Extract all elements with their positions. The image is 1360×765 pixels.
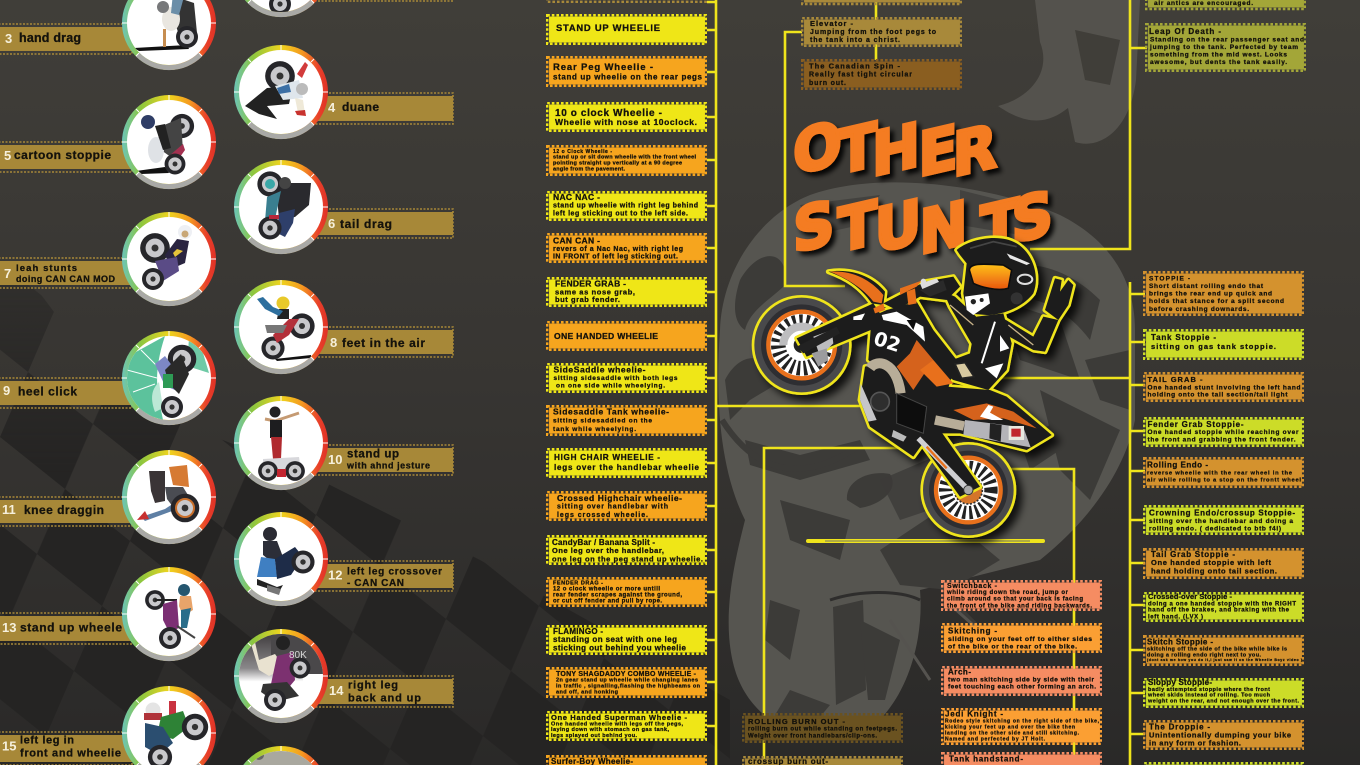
box: 12 o clock wheelie [547,146,706,175]
stunt 5: cartoon stoppie: 5 [4,148,11,163]
box: elevator: the tank into a christ. [810,37,900,44]
box: rolling endo: reverse wheelie with the rear wheel in the [1147,470,1293,476]
box: leap of death: Leap Of Death - [1149,27,1221,36]
box: switchback: climb around so that your back is facing [947,597,1083,603]
box: stoppie: holds that stance for a split second [1149,298,1284,305]
box: rolling burn out: Weight over front handlebars/clip-ons. [748,733,877,739]
stunt 16 [243,746,319,765]
stunt 9: heel click [0,331,216,423]
panel: stoppie column [1144,272,1303,765]
stunt 6: tail drag [234,160,453,252]
box: the droppie [1144,721,1303,749]
box: rolling endo [1144,458,1303,487]
box: 10 o clock wheelie: 10 o clock Wheelie - [555,108,662,119]
box: nac nac: NAC NAC - [553,192,600,202]
box: sloppy stoppie [1144,678,1303,707]
tank graphics with number 02 [871,312,953,390]
stunt 7: leah stunts: 7 [4,266,11,281]
box: can can: IN FRONT of left leg sticking out. [553,254,678,261]
box: fender drag: 12 o clock wheelie or more untill [553,586,660,592]
box: skitching: sliding on your feet off to either sides [948,636,1092,643]
illustration: rider on orange motorbike doing a wheelie [753,238,1073,537]
stunt 6: tail drag: tail drag [340,217,392,231]
title: STUNTS [793,137,1053,307]
box: top partial [547,0,706,2]
stunt 14: right leg back and up [234,629,453,721]
stunt 3: hand drag: hand drag [19,31,81,45]
box: tank stoppie [1144,330,1303,359]
box: crowning endo [1144,506,1303,534]
box: fender grab stoppie [1144,418,1303,446]
box: rolling burn out: ROLLING BURN OUT - [748,717,846,726]
stunt 15: left leg in front and wheelie: 15 [2,739,16,754]
box: high chair wheelie: legs over the handlebar wheelie [554,463,700,472]
title [793,71,1053,307]
box: rolling burn out [743,714,902,742]
box: skitch stoppie: (dont ask me how you do it,i just saw it on the Wheelie Boyz video ) [1147,658,1302,662]
box: crossed highchair wheelie: legs crossed wheelie. [557,512,648,519]
stunt 4: duane: duane [342,100,379,114]
box: one handed superman wheelie: One handed wheelie with legs off the pegs, [551,722,683,728]
box: tail grab: holding onto the tail section/tail light [1148,392,1288,399]
box: stoppie: brings the rear end up quick and [1149,290,1272,297]
box: fender drag: FENDER DRAG - [553,580,603,586]
stunt 11: knee draggin: 11 [2,502,16,517]
box: fender grab: same as nose grab, [555,288,635,297]
fender and fork details [797,271,940,367]
box: fender grab stoppie: the front and grabbing the front fender. [1148,437,1296,444]
box: flamingo: FLAMINGO - [553,627,603,636]
box: one handed superman wheelie: laying down with stomach on gas tank, [551,727,669,733]
box: skitching: of the bike or the rear of the bike. [948,644,1077,651]
stunt 15: left leg in front and wheelie: front and wheelie [20,748,121,760]
stunt 2 [234,0,453,15]
stunt 3: hand drag: 3 [5,31,12,46]
box: rolling endo: air while rolling to a stop on the frontt wheel [1147,477,1301,483]
box: fender grab [547,278,706,306]
front fork [918,438,973,495]
box: flamingo: sticking out behind you wheelie [553,643,687,652]
box: tank handstand [942,753,1101,765]
box: one handed superman wheelie: legs splayed out behind you. [551,733,637,739]
box: fender drag: rear fender scrapes against the ground, [553,593,682,599]
box: jedi knight: Rodeo style skitching on the right side of the bike, [945,718,1100,724]
box: arch: Arch- [948,668,971,676]
box: crossed-over stoppie: left hand. (LVX ) [1148,615,1203,621]
box: tank handstand: Tank handstand- [949,755,1023,764]
stunt 4: duane: 4 [328,100,336,115]
box: 12 o clock wheelie: stand up or sit down wheelie with the front wheel [553,154,696,160]
stunt 11: knee draggin: knee draggin [24,503,104,517]
box: tail grab stoppie: Tail Grab Stoppie - [1151,550,1235,559]
box: arch: two man skitching side by side with their [948,676,1094,683]
stunt 11: knee draggin [0,450,216,542]
stunt 7: leah stunts [0,212,216,304]
box: candybar banana split: One leg over the handlebar, [552,546,664,555]
tail graphics [953,403,1037,428]
box: sloppy stoppie: wheel skids instead of rolling. Too much [1147,693,1271,699]
panel: numbered stunt circles [0,0,453,765]
box: can can [547,234,706,262]
stunt 12: left leg crossover [234,512,453,604]
stunt 7: leah stunts: doing CAN CAN MOD [16,274,116,284]
box: sloppy stoppie: Sloppy Stoppie- [1148,678,1212,687]
stunt 15: left leg in front and wheelie: left leg in [20,735,74,747]
background skull artwork [718,0,1140,741]
box: the droppie: Unintentionally dumping your bike [1149,730,1291,739]
box: 12 o clock wheelie: angle from the pavement. [553,166,625,172]
box: fender grab: but grab fender. [555,295,620,304]
box: rolling burn out: rolling burn out while standing on feetpegs. [748,726,897,732]
box: surfer-boy wheelie [547,756,706,765]
box: one handed wheelie [547,322,706,350]
box: skitching [942,624,1101,652]
box: air antics: air antics are encouraged. [1154,0,1253,7]
box: tank stoppie: sitting on gas tank stoppie. [1151,342,1276,351]
rider suit details [920,279,1033,378]
box: leap of death: awesome, but dents the tank easily. [1150,59,1287,66]
stunt 15: left leg in front and wheelie [0,686,216,765]
box: can can: revers of a Nac Nac, with right leg [553,246,683,253]
box: jedi knight [942,709,1101,744]
box: tail grab [1144,373,1303,401]
panel: air tricks top centre [802,0,961,89]
box: the canadian spin: burn out. [809,80,846,87]
box: 12 o clock wheelie: 12 o Clock Wheelie - [553,149,612,155]
stunt 10: stand up with hand jesture: with ahnd jesture [346,460,430,470]
box: fender grab stoppie: Fender Grab Stoppie- [1148,420,1244,429]
panel: burnout column [743,714,902,765]
box: bottom partial [1144,763,1303,765]
box: 10 o clock wheelie [547,103,706,131]
box: skitch stoppie: doing a rolling endo right next to you. [1147,653,1261,659]
box: fender drag: or cut off fender and pull by rope. [553,599,662,605]
lower wheel [922,443,1015,537]
box: the canadian spin: Really fast tight circular [809,72,912,79]
box: rear peg wheelie: Rear Peg Wheelie - [553,62,653,73]
box: tail grab stoppie: One handed stoppie with left [1151,558,1272,567]
box: crossed highchair wheelie: sitting over handlebar with [557,504,668,511]
stunt 4: duane [234,45,453,137]
box: tank stoppie: Tank Stoppie - [1151,333,1216,342]
box: crossed highchair wheelie: Crossed Highchair wheelie- [557,493,682,503]
box: crossup burn out [743,757,902,765]
box: leap of death [1146,24,1305,71]
box: leap of death: something from the mid west. Looks [1150,52,1287,58]
title: OTHER [793,71,997,227]
box: switchback: while riding down the road, jump or [946,590,1069,596]
box: candybar banana split: CandyBar / Banana Split - [552,538,655,547]
box: skitch stoppie [1144,636,1303,665]
box: stand up wheelie [547,15,706,44]
stunt 10: stand up with hand jesture: 10 [328,452,342,467]
box: one handed wheelie: ONE HANDED WHEELIE [554,331,658,341]
box: top partial [802,0,961,4]
stunt 8: feet in the air: feet in the air [342,336,425,350]
box: high chair wheelie: HIGH CHAIR WHEELIE - [554,453,660,462]
box: stoppie [1144,272,1303,315]
stunt 6: tail drag: 6 [328,216,335,231]
stunt 14: right leg back and up: back and up [348,693,421,705]
engine [860,383,927,442]
stunt 5: cartoon stoppie: cartoon stoppie [14,148,111,162]
box: skitch stoppie: Skitch Stoppie - [1147,638,1213,646]
box: candybar banana split [547,536,706,564]
stunt 9: heel click: 9 [3,383,10,398]
box: switchback [942,581,1101,610]
box: fender grab: FENDER GRAB - [555,278,626,288]
box: tony shagdaddy combo wheelie [547,668,706,697]
box: the canadian spin: The Canadian Spin - [809,62,900,70]
box: nac nac [547,192,706,220]
stunt 10: stand up with hand jesture: stand up [347,449,399,461]
box: rolling endo: Rolling Endo - [1147,461,1208,470]
stunt 12: left leg crossover: 12 [328,567,342,582]
stunt 14: right leg back and up: 14 [329,683,344,698]
box: jedi knight: Jedi Knight - [945,710,1003,719]
box: crowning endo: Crowning Endo/crossup Stoppie- [1149,509,1295,518]
box: crossed-over stoppie: hand off the brakes, and braking with the [1148,608,1290,614]
box: tail grab stoppie: hand holding onto tail section. [1151,566,1277,575]
box: sloppy stoppie: weight on the rear, and not enough over the front. [1147,699,1299,705]
stunt 13: stand up wheele: stand up wheele [20,621,122,635]
box: 10 o clock wheelie: Wheelie with nose at 10oclock. [555,117,697,127]
box: tail grab stoppie [1144,549,1303,578]
box: fender drag [547,578,706,606]
box: jedi knight: Named and perfected by JT Holt. [945,737,1046,743]
box: rear peg wheelie [547,57,706,86]
box: tail grab: TAIL GRAB - [1148,375,1203,384]
box: stand up wheelie: STAND UP WHEELIE [556,22,660,33]
box: skitching: Skitching - [948,627,997,636]
box: leap of death: jumping to the tank. Perfected by team [1149,44,1298,51]
tank graphics with number 02: 02 [871,327,904,357]
box: crossed-over stoppie [1144,592,1303,621]
box: crowning endo: rolling endo. ( dedicated to btb f4i) [1149,526,1281,533]
stunt 12: left leg crossover: - CAN CAN [347,578,404,589]
stunt 5: cartoon stoppie [0,95,216,187]
exhaust pipes and silencer [870,363,1031,447]
stunt 12: left leg crossover: left leg crossover [347,566,442,577]
box: jedi knight: kicking your feet up and over the bike then [945,724,1075,730]
stunt 13: stand up wheele: 13 [2,620,16,635]
box: tony shagdaddy combo wheelie: in traffic , signalling,flashing the highbeams on [556,683,701,689]
panel: skitching column [942,581,1101,765]
box: the droppie: The Droppie - [1149,722,1210,731]
box: skitch stoppie: skitching off the side of the bike while bike is [1147,646,1287,652]
box: sidesaddle tank wheelie: tank while wheelying. [553,426,636,433]
box: switchback: the front of the bike and riding backwards. [947,603,1092,609]
box: elevator [802,18,961,46]
box: crossed highchair wheelie [547,492,706,520]
box: sidesaddle wheelie: sitting sidesaddle with both legs [554,375,678,382]
box: leap of death: Standing on the rear passenger seat and [1150,36,1304,43]
helmet, goggles and face mask [965,242,1032,315]
box: arch [942,667,1101,695]
box: crossed-over stoppie: doing a one handed stoppie with the RIGHT [1148,601,1296,607]
box: sidesaddle tank wheelie: sitting sidesaddled on the [553,417,652,424]
ground line [808,539,1043,543]
box: switchback: Switchback - [947,583,998,590]
box: one handed superman wheelie [547,712,706,740]
box: tony shagdaddy combo wheelie: and off, and honking [556,689,618,695]
stunt 9: heel click: heel click [18,385,77,399]
box: stoppie: before crashing downards. [1149,306,1249,313]
box: air antics [1146,0,1305,9]
box: sidesaddle tank wheelie [547,406,706,435]
box: jedi knight: landing on the other side and still skitching. [945,730,1080,736]
box: can can: CAN CAN - [553,236,600,246]
box: nac nac: stand up wheelie with right leg behind [553,202,698,210]
stunt 13: stand up wheele [0,567,216,659]
box: flamingo: standing on seat with one leg [553,635,677,644]
box: nac nac: left leg sticking out to the left side. [553,211,688,218]
box: flamingo [547,626,706,654]
box: crossed-over stoppie: Crossed-over Stoppie - [1148,592,1232,601]
box: fender grab stoppie: One handed stoppie while reaching over [1148,429,1299,436]
stunt 8: feet in the air [234,280,453,372]
background checkered flag pattern [0,285,616,676]
box: stoppie: STOPPIE - [1149,276,1190,282]
stunt 14: right leg back and up: right leg [348,679,398,691]
box: crowning endo: sitting over the handlebar and doing a [1149,518,1293,525]
box: one handed superman wheelie: One Handed Superman Wheelie - [551,713,687,722]
box: tail grab: One handed stunt involving the left hand [1148,384,1301,391]
box: elevator: Elevator - [810,19,854,28]
stunt 14: right leg back and up: 80K [289,650,307,661]
box: arch: feet touching each other forming an arch. [948,684,1096,691]
box: sidesaddle wheelie [547,364,706,392]
stunt 3: hand drag [0,0,216,68]
box: tony shagdaddy combo wheelie: 2n gear stand up wheelie while changing lanes [556,678,698,684]
connector lines [707,0,1147,765]
box: sidesaddle wheelie: SideSaddle wheelie- [554,364,646,374]
box: the droppie: in any form or fashion. [1149,739,1241,748]
box: 12 o clock wheelie: pointing straight up vertically at a 90 degree [553,160,682,166]
stunt 8: feet in the air: 8 [330,335,337,350]
box: elevator: Jumping from the foot pegs to [810,29,936,36]
stunt 10: stand up with hand jesture [234,396,453,488]
panel: wheelie stunts column [547,0,706,765]
box: sidesaddle wheelie: on one side while wheelying. [556,382,665,389]
box: stoppie: Short distant rolling endo that [1149,283,1264,290]
panel: air and stand column top right [1146,0,1305,71]
upper wheel [753,296,850,394]
box: the canadian spin [802,60,961,89]
stunt 7: leah stunts: leah stunts [16,263,77,274]
box: rear peg wheelie: stand up wheelie on the rear pegs [553,72,703,82]
box: sloppy stoppie: badly attempted stoppie where the front [1148,687,1270,693]
box: high chair wheelie [547,449,706,477]
bike and rider silhouette [797,238,1073,497]
box: tony shagdaddy combo wheelie: TONY SHAGDADDY COMBO WHEELIE - [556,671,697,678]
box: candybar banana split: one leg on the peg stand up wheelie. [552,554,703,563]
box: sidesaddle tank wheelie: Sidesaddle Tank wheelie- [553,406,669,416]
